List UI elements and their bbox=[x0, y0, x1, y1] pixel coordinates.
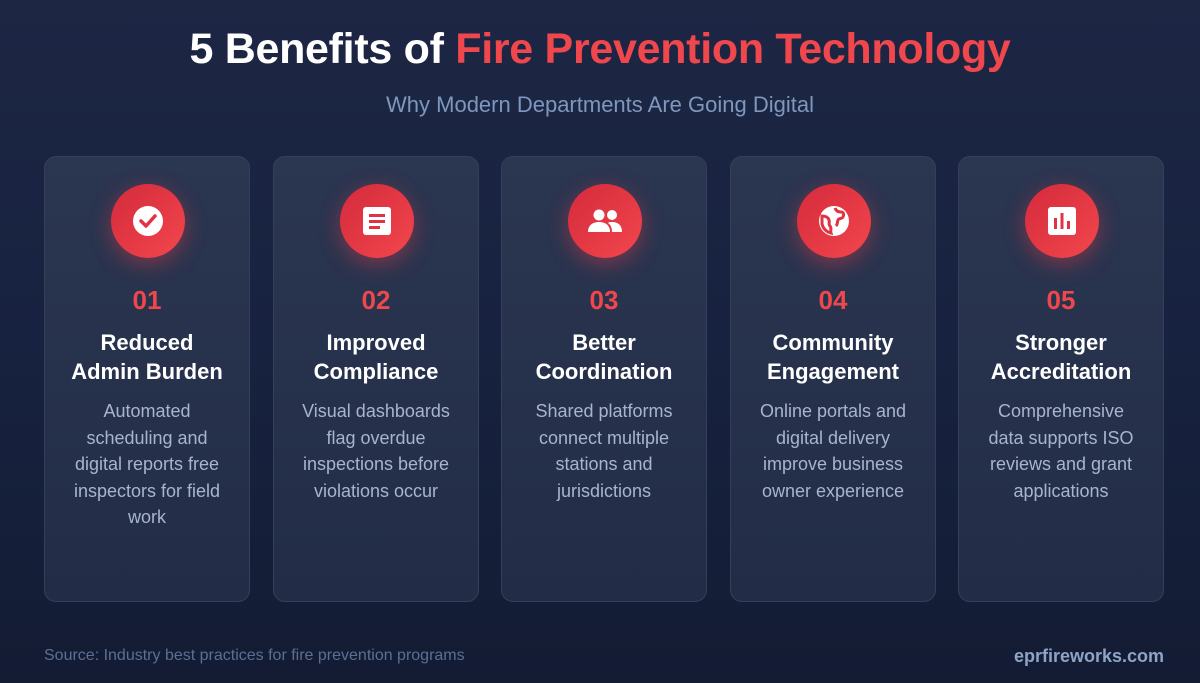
card title: Community bbox=[772, 330, 894, 355]
number: 01 bbox=[133, 285, 161, 315]
icon: chart bbox=[1025, 184, 1099, 258]
panel: card 2 bbox=[273, 156, 479, 602]
icon: document bbox=[340, 184, 414, 258]
card title: Compliance bbox=[314, 358, 438, 384]
brand: eprfireworks.com bbox=[1014, 646, 1164, 666]
icon: people bbox=[568, 184, 642, 258]
description: Automated scheduling and digital reports free inspectors for field work bbox=[74, 401, 220, 527]
panel: card 3 bbox=[501, 156, 707, 602]
number: 03 bbox=[590, 285, 618, 315]
title: 5 Benefits of Fire Prevention Technology bbox=[189, 25, 1011, 73]
panel: card 5 bbox=[958, 156, 1164, 602]
card title bbox=[314, 330, 438, 384]
icon: check bbox=[111, 184, 185, 258]
icon: globe bbox=[797, 184, 871, 258]
card title bbox=[71, 330, 223, 384]
card title: Stronger bbox=[1015, 330, 1107, 355]
description: Visual dashboards flag overdue inspections before violations occur bbox=[302, 401, 450, 501]
panel: card 4 bbox=[730, 156, 936, 602]
description: Comprehensive data supports ISO reviews and grant applications bbox=[988, 401, 1134, 501]
number: 04 bbox=[819, 285, 847, 315]
card title: Admin Burden bbox=[71, 358, 223, 384]
card title bbox=[536, 330, 672, 384]
card title bbox=[767, 330, 899, 384]
number: 02 bbox=[362, 285, 390, 315]
card title: Coordination bbox=[536, 358, 672, 384]
card title: Improved bbox=[326, 330, 426, 355]
panel: card 1 bbox=[44, 156, 250, 602]
subtitle: Why Modern Departments Are Going Digital bbox=[386, 92, 814, 117]
card title bbox=[991, 330, 1131, 384]
card title: Better bbox=[572, 330, 636, 355]
description: Shared platforms connect multiple stations and jurisdictions bbox=[535, 401, 673, 501]
card title: Engagement bbox=[767, 358, 899, 384]
card title: Reduced bbox=[101, 330, 193, 355]
number: 05 bbox=[1047, 285, 1075, 315]
footer source: Source: Industry best practices for fire prevention programs bbox=[44, 647, 465, 664]
description: Online portals and digital delivery improve business owner experience bbox=[760, 401, 906, 501]
card title: Accreditation bbox=[991, 358, 1131, 384]
